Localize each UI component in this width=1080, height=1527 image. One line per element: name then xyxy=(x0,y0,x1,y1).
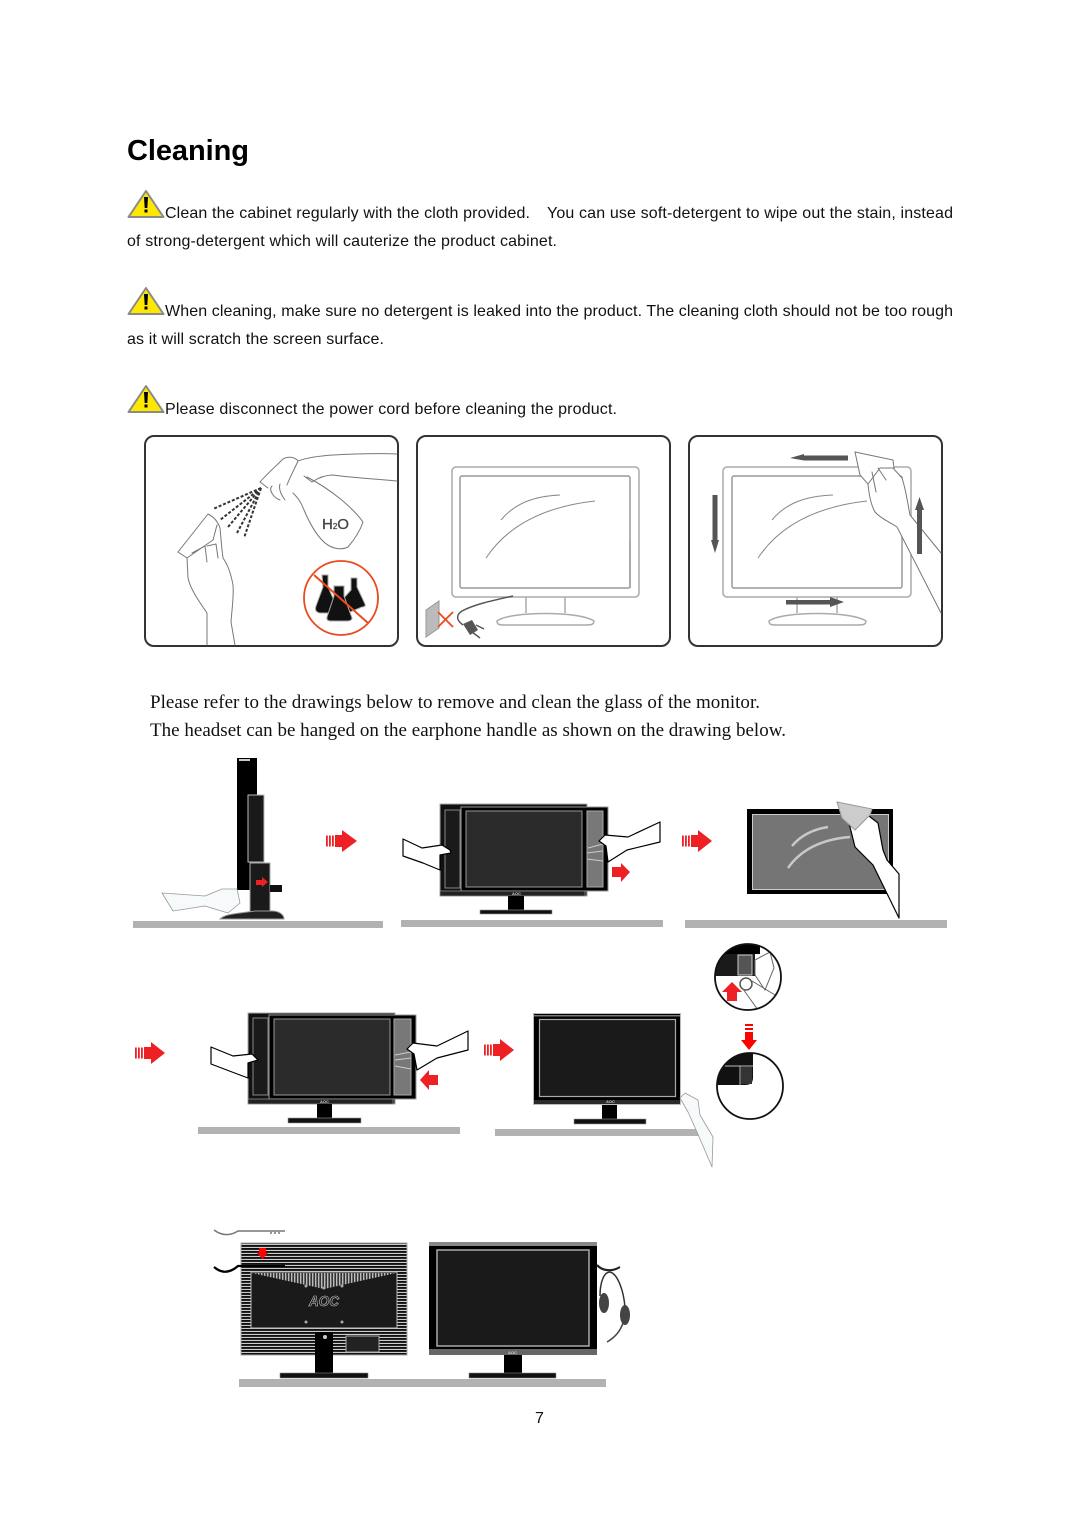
icon: monitor with bezel sliding right: AOC xyxy=(512,891,521,896)
arrow: red into step 4 xyxy=(135,1042,165,1064)
icon: front monitor: AOC xyxy=(508,1350,517,1355)
icon: hand with cloth xyxy=(855,452,941,613)
icon: hand with spray bottle xyxy=(260,454,397,549)
warning note 2 xyxy=(127,288,953,348)
arrow: small red xyxy=(256,877,268,887)
arrow: up xyxy=(915,497,924,554)
page number: 7 xyxy=(535,1410,544,1427)
text: instructions: Please refer to the drawings below to remove and clean the glass of the monitor. xyxy=(150,692,760,713)
panel: wipe the screen xyxy=(689,436,942,646)
icon: right hand xyxy=(599,822,660,862)
icon: glass panel xyxy=(747,809,893,894)
detail: clip close-up xyxy=(715,944,783,1119)
icon: hand xyxy=(680,1093,713,1167)
arrow: red left xyxy=(420,1070,438,1090)
icon: power cord and plug xyxy=(458,596,513,638)
warning note 3 xyxy=(128,386,617,418)
panel: spray water on cloth xyxy=(145,436,398,646)
shelf bar xyxy=(239,1379,606,1387)
icon: monitor front: AOC xyxy=(606,1099,615,1104)
circle: upper detail xyxy=(715,944,781,1010)
arrow: red step 2 to 3 xyxy=(682,830,712,852)
step 2: open frame with both hands xyxy=(401,804,663,927)
arrow: red up xyxy=(722,982,742,1001)
shelf bar xyxy=(401,920,663,927)
note 2 text: When cleaning, make sure no detergent is leaked into the product. The cleaning cloth should not be too rough xyxy=(165,303,953,320)
icon: cloth xyxy=(837,802,872,830)
arrow: red step 1 to 2 xyxy=(326,830,357,852)
icon: right hand xyxy=(407,1031,468,1070)
step 1: release side of monitor xyxy=(133,758,383,928)
icon: black earphone handle xyxy=(214,1266,285,1272)
icon: hand with cloth xyxy=(178,514,235,645)
circle: lower detail xyxy=(716,1052,783,1119)
icon: headset xyxy=(597,1265,630,1342)
arrow: red down xyxy=(257,1248,268,1259)
step 6: rear of monitor with handle xyxy=(214,1230,630,1387)
icon: monitor with bezel sliding left xyxy=(248,1013,416,1123)
shelf bar xyxy=(133,921,383,928)
shelf bar xyxy=(495,1129,700,1136)
icon: no chemicals sign xyxy=(304,561,378,635)
icon: warning triangle 3 xyxy=(128,386,164,412)
icon: front monitor xyxy=(429,1242,597,1378)
text: instructions: The headset can be hanged on the earphone handle as shown on the drawing below. xyxy=(150,720,786,741)
spray droplets xyxy=(213,488,261,538)
step 3: wipe the glass xyxy=(685,802,947,928)
note 1 text: Clean the cabinet regularly with the cloth provided. xyxy=(165,205,530,222)
icon: red cross xyxy=(438,612,453,627)
note 1 text: of strong-detergent which will cauterize the product cabinet. xyxy=(127,233,557,250)
icon: hand xyxy=(847,813,899,918)
arrow: red into step 5 xyxy=(484,1039,514,1061)
icon: monitor with bezel sliding left: AOC xyxy=(320,1099,329,1104)
arrow: red right xyxy=(612,863,630,882)
icon: earphone handle outline xyxy=(214,1230,285,1235)
icon: monitor outline xyxy=(723,467,911,625)
note 3 text: Please disconnect the power cord before cleaning the product. xyxy=(165,401,617,418)
step 5: assembled monitor xyxy=(495,1014,713,1167)
panel: unplug power cord xyxy=(417,436,670,646)
step 4: close frame xyxy=(198,1013,468,1134)
icon: hand xyxy=(162,889,240,913)
icon: warning triangle 2 xyxy=(128,288,164,314)
panel 3 frame xyxy=(689,436,942,646)
icon: wall socket xyxy=(426,601,439,637)
note 1 text: You can use soft-detergent to wipe out the stain, instead xyxy=(547,205,953,222)
icon: monitor with bezel sliding right xyxy=(440,804,608,914)
icon: monitor front xyxy=(534,1014,680,1124)
note 1 text xyxy=(127,205,953,250)
panel 2 frame xyxy=(417,436,670,646)
icon: monitor side view xyxy=(220,758,284,919)
arrow: left xyxy=(790,454,848,460)
text: H2O label: H2O xyxy=(322,516,349,533)
text: instructions xyxy=(150,692,786,741)
shelf bar xyxy=(198,1127,460,1134)
panel 1 frame xyxy=(145,436,398,646)
text: AOC logo: AOC xyxy=(308,1293,340,1310)
arrow: red down xyxy=(741,1024,757,1050)
note 2 text xyxy=(127,303,953,348)
icon: left hand xyxy=(403,839,451,870)
icon: monitor outline xyxy=(452,467,639,625)
icon: left hand xyxy=(211,1047,258,1078)
icon: warning triangle 1 xyxy=(128,191,164,217)
icon: monitor rear view xyxy=(241,1243,407,1378)
arrow: down xyxy=(711,495,719,553)
title: Cleaning xyxy=(127,135,249,167)
warning note 1 xyxy=(127,191,953,250)
shelf bar xyxy=(685,920,947,928)
arrow: right xyxy=(786,597,844,607)
note 2 text: as it will scratch the screen surface. xyxy=(127,331,384,348)
